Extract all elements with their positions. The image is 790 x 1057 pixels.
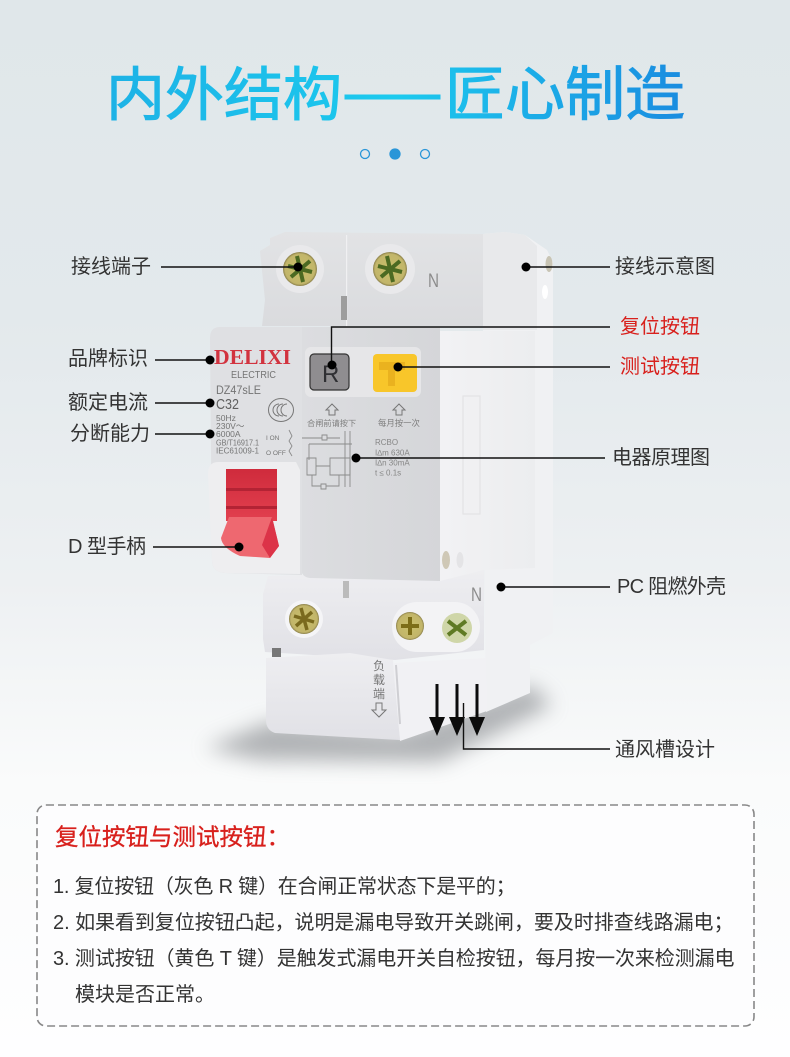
reset and test button recess — [305, 347, 421, 397]
brand logo: DELIXI — [214, 345, 291, 369]
note 2: 2. 如果看到复位按钮凸起，说明是漏电导致开关跳闸，要及时排查线路漏电； — [53, 911, 733, 934]
screw: upper right terminal — [365, 244, 415, 294]
load terminal label: 载 — [373, 673, 385, 687]
upper terminal block — [260, 232, 483, 326]
rated specifications: O OFF — [266, 450, 286, 457]
note 3 — [53, 947, 735, 1006]
rated specifications: IEC61009-1 — [216, 446, 260, 456]
load terminal flap — [393, 658, 487, 741]
lower terminal block — [263, 570, 484, 660]
callout: brand label — [68, 347, 214, 370]
callout: test button: 测试按钮 — [620, 355, 700, 378]
callout: rated current: 额定电流 — [68, 391, 148, 414]
RCBO rating text: I∆n 30mA — [375, 458, 410, 468]
callout: D handle: D 型手柄 — [68, 535, 146, 558]
callout: brand label: 品牌标识 — [68, 347, 148, 370]
callout: terminal — [71, 255, 302, 278]
load terminal label: 端 — [373, 687, 385, 701]
title: 匠心制造 — [445, 62, 685, 128]
callout: test button — [394, 355, 700, 378]
circuit schematic — [289, 430, 352, 489]
screw: upper left terminal — [276, 245, 324, 293]
screw: lower middle — [396, 612, 424, 640]
RCBO rating text: I∆m 630A — [375, 448, 410, 458]
gray reset button R: R — [322, 361, 339, 388]
note 3: 3. 测试按钮（黄色 T 键）是触发式漏电开关自检按钮，每月按一次来检测漏电 — [53, 947, 735, 970]
rated specifications: 50Hz — [216, 413, 236, 423]
CCC mark — [268, 398, 294, 422]
right front panel — [440, 331, 535, 581]
callout: schematic — [352, 446, 710, 469]
callout: PC shell: PC 阻燃外壳 — [617, 575, 726, 598]
title: 内外结构 — [106, 63, 342, 128]
rated specifications: 6000A — [216, 429, 241, 439]
rated specifications: DZ47sLE — [216, 385, 261, 397]
button arrow markers and captions: 合闸前请按下 — [307, 418, 356, 428]
note 3: 模块是否正常。 — [75, 983, 215, 1006]
callout: terminal: 接线端子 — [71, 255, 151, 278]
rated specifications: ELECTRIC — [231, 369, 276, 381]
callout: ventilation slots — [464, 703, 715, 761]
callout: wiring diagram — [522, 255, 715, 278]
rear side housing — [483, 232, 553, 712]
panel heading: 复位按钮与测试按钮： — [55, 824, 290, 850]
callout: ventilation slots: 通风槽设计 — [615, 738, 715, 761]
callout: breaking capacity — [70, 422, 214, 445]
rated specifications — [216, 369, 286, 457]
lower N mark: N — [471, 585, 482, 606]
title — [106, 62, 685, 128]
gray reset button R — [310, 354, 349, 390]
pagination dots — [360, 149, 430, 159]
callout: breaking capacity: 分断能力 — [70, 422, 150, 445]
load terminal label — [372, 659, 386, 717]
floor shadow — [205, 685, 552, 762]
note 1: 1. 复位按钮（灰色 R 键）在合闸正常状态下是平的； — [53, 875, 515, 898]
RCBO rating text — [375, 438, 410, 478]
downward vent arrows — [429, 684, 485, 736]
panel: reset and test button notes — [37, 805, 754, 1026]
RCBO rating text: RCBO — [375, 438, 398, 447]
callout: reset button: 复位按钮 — [620, 315, 700, 338]
rated specifications: GB/T16917.1 — [216, 438, 259, 448]
callout: rated current — [68, 391, 214, 414]
yellow test button — [373, 354, 417, 392]
button arrow markers and captions — [307, 404, 420, 428]
circuit breaker product illustration — [205, 232, 553, 762]
red handle — [221, 469, 279, 558]
upper N mark: N — [428, 271, 439, 292]
rated specifications: I ON — [266, 435, 280, 442]
left label panel — [210, 327, 302, 575]
RCBO rating text: t ≤ 0.1s — [375, 468, 401, 478]
callout: D handle — [68, 535, 244, 558]
center front panel — [300, 327, 440, 581]
load terminal label: 负 — [373, 659, 385, 673]
callout: PC shell — [496, 575, 726, 598]
screw: lower left — [285, 600, 323, 638]
handle guard — [208, 462, 300, 574]
callout: schematic: 电器原理图 — [612, 446, 710, 469]
callout: reset button — [328, 315, 700, 370]
rated specifications: C32 — [216, 396, 239, 413]
callout: wiring diagram: 接线示意图 — [615, 255, 715, 278]
lower cover — [266, 653, 400, 740]
screw: lower right — [442, 613, 472, 643]
rated specifications: 230V～ — [216, 421, 245, 431]
side mounting holes — [542, 256, 552, 299]
button arrow markers and captions: 每月按一次 — [378, 418, 420, 428]
screw housing recess — [392, 602, 480, 652]
